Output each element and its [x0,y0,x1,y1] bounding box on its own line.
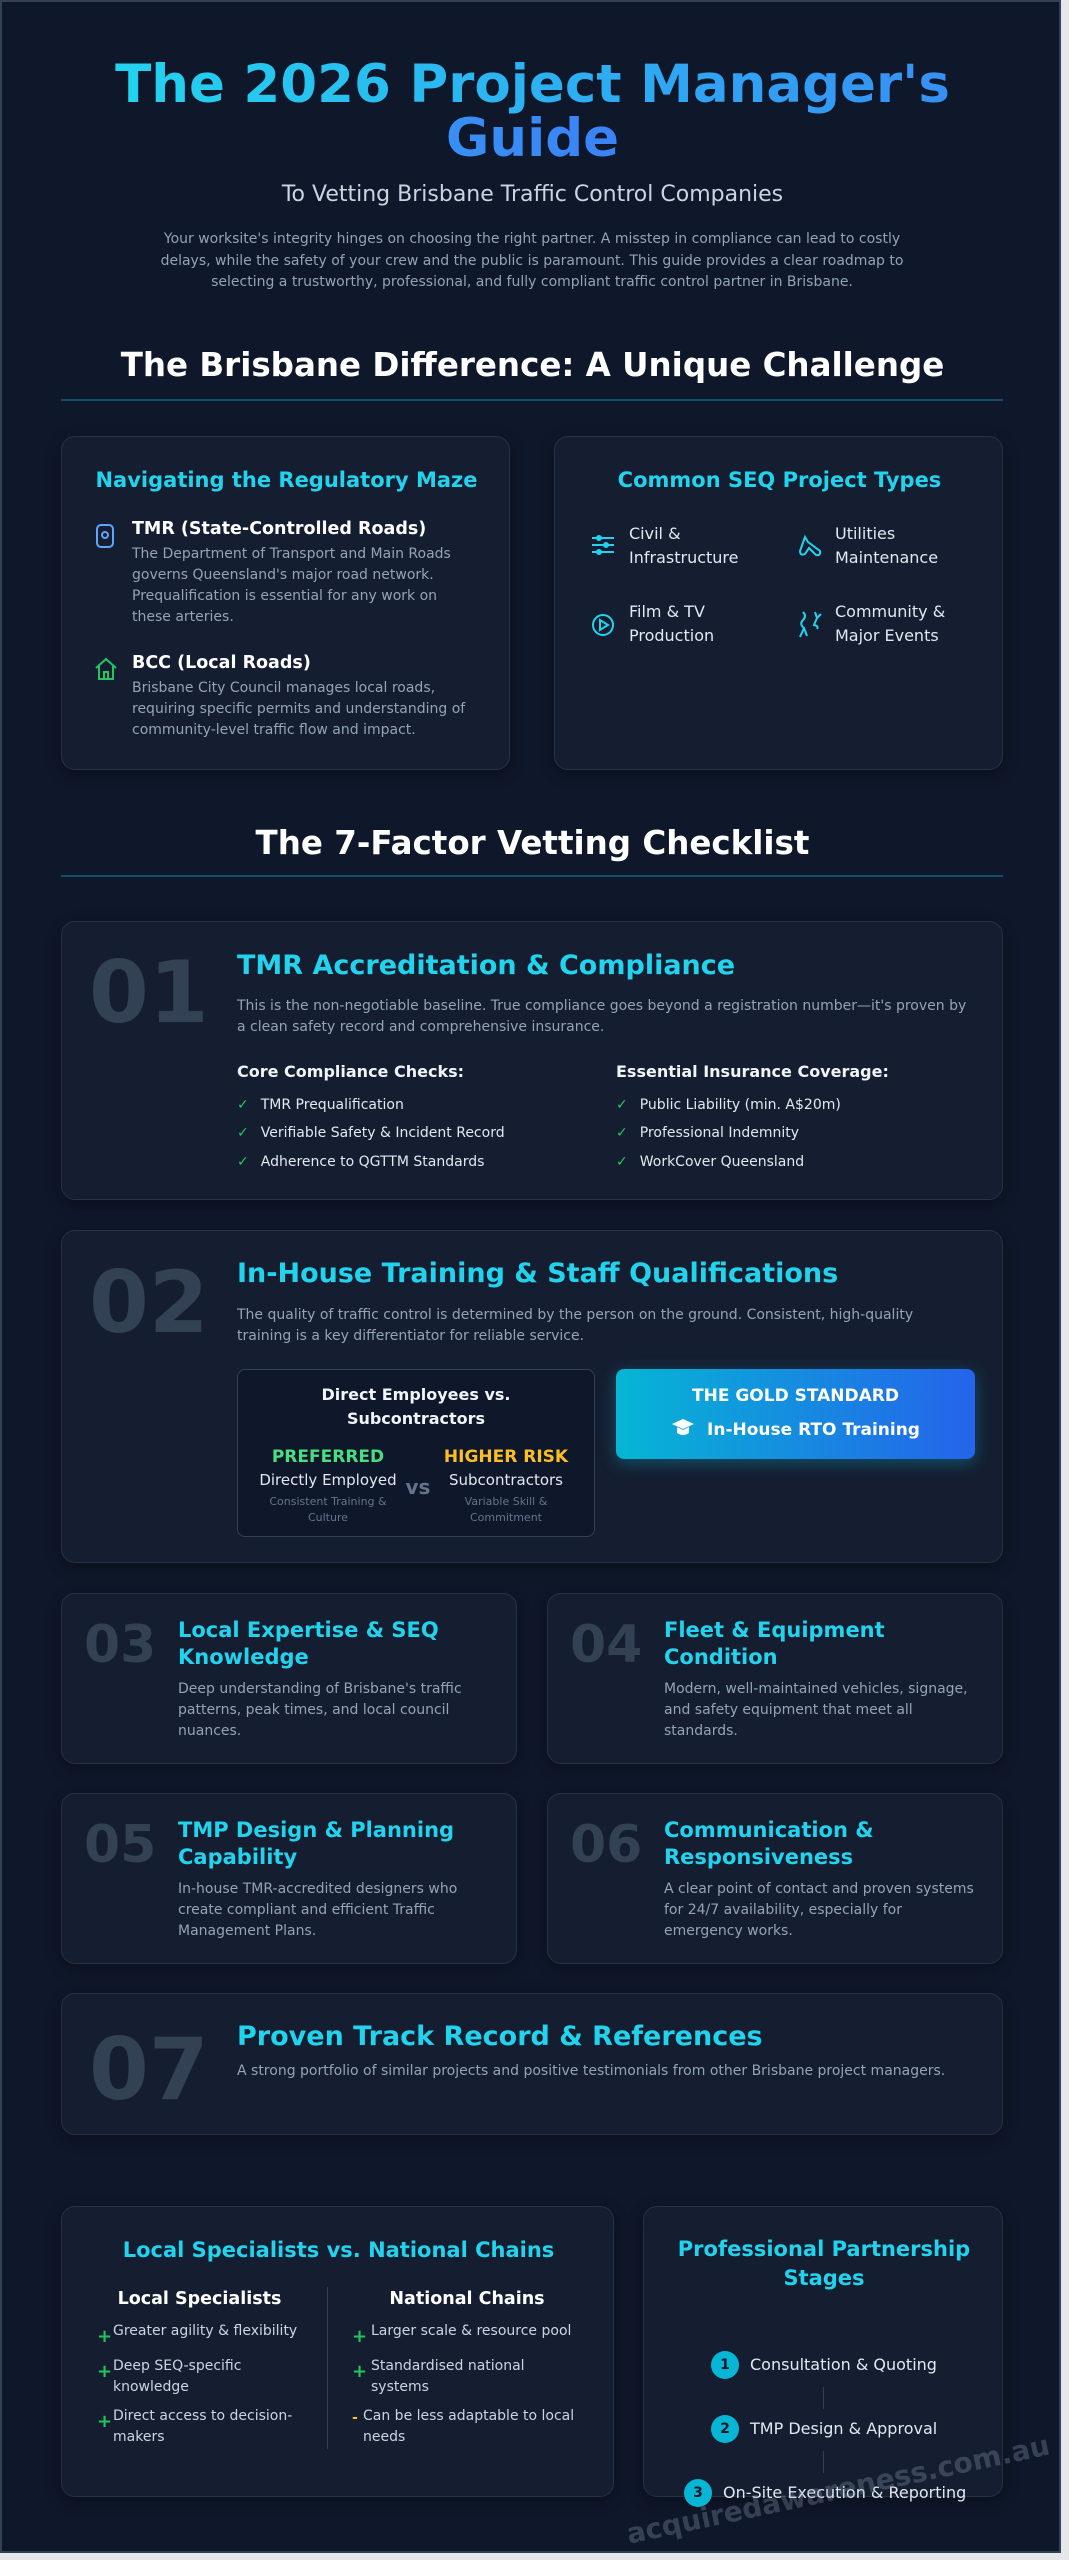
BCC text: Brisbane City Council manages local roads, requiring specific permits and understanding of community-level traffic flow and impact. [132,680,465,738]
column: national: + [352,2326,367,2347]
panel: project types [554,436,1003,770]
panel: factor 04: 04 [570,1615,642,1675]
watermark: acquiredawareness.com.au [623,2429,1053,2551]
panel: factor 06: Communication & Responsiveness [664,1818,874,1869]
icon: TMR [96,524,114,548]
comparison box: Variable Skill & Commitment [465,1495,547,1524]
title: Guide [446,108,619,169]
item: civil: Civil & [629,524,681,543]
stage 2 [711,2415,937,2443]
panel: factor 04 [547,1593,1003,1764]
column: national: systems [371,2379,429,2395]
column: national: Standardised national [371,2358,525,2374]
gold standard callout [616,1369,975,1459]
item: utilities [799,524,938,567]
list: insurance [616,1062,889,1170]
BCC heading: BCC (Local Roads) [132,653,311,673]
panel: factor 05: In-house TMR-accredited designers who create compliant and efficient Traffic Management Plans. [178,1881,457,1939]
title 01: TMR Accreditation & Compliance [237,950,735,981]
panel: partnership stages: Professional Partnership [678,2237,970,2261]
panel: local vs national [61,2206,614,2497]
item: utilities: Maintenance [835,548,938,567]
column: local [97,2289,297,2445]
title [115,54,950,169]
item: events [799,602,945,645]
subtitle: To Vetting Brisbane Traffic Control Companies [282,182,783,207]
list: insurance: ✓ Professional Indemnity [616,1125,799,1141]
column: national: needs [363,2429,405,2445]
column: national [352,2289,574,2445]
number 02: 02 [89,1253,209,1353]
list: insurance: ✓ Public Liability (min. A$20m) [616,1097,841,1113]
stage 3: 3 [693,2485,703,2501]
panel: factor 05 [61,1793,517,1964]
stage 1: 1 [720,2357,730,2373]
panel: factor 06: A clear point of contact and proven systems for 24/7 availability, especially for emergency works. [664,1881,974,1939]
column: local: makers [113,2429,164,2445]
column: local: Local Specialists [118,2289,281,2309]
panel: factor 01 [61,921,1003,1200]
heading: Brisbane Difference: The Brisbane Difference: A Unique Challenge [121,346,944,384]
TMR text: The Department of Transport and Main Roads governs Queensland's major road network. Prequalification is essential for any work on these arteries. [132,546,451,625]
panel: factor 03: Local Expertise & SEQ Knowledge [178,1618,439,1669]
panel: factor 07 [61,1993,1003,2135]
panel: factor 03: Deep understanding of Brisbane's traffic patterns, peak times, and local council nuances. [178,1681,462,1739]
comparison box: vs [406,1475,430,1499]
panel heading: Common SEQ Project Types [618,468,941,492]
icon: house [95,658,117,680]
panel: partnership stages [643,2206,1003,2497]
column: national: - [352,2410,358,2426]
list: compliance checks: ✓ Verifiable Safety & Incident Record [237,1125,505,1141]
panel: factor 07: 07 [89,2020,209,2120]
comparison box: HIGHER RISK [444,1447,568,1467]
panel: factor 05: 05 [84,1815,156,1875]
column: local: + [97,2326,112,2347]
item: film: Production [629,626,714,645]
item: civil: Infrastructure [629,548,738,567]
column: local: knowledge [113,2379,189,2395]
panel: factor 04: Modern, well-maintained vehicles, signage, and safety equipment that meet all standards. [664,1681,968,1739]
column: national: + [352,2361,367,2382]
gold standard callout: In-House RTO Training [707,1420,920,1440]
stage 2: 2 [720,2421,730,2437]
column: local: Deep SEQ-specific [113,2358,241,2374]
stage 3: On-Site Execution & Reporting [723,2483,966,2502]
item: events: Community & [835,602,945,621]
item: film [592,602,714,645]
list: insurance: ✓ WorkCover Queensland [616,1154,804,1170]
panel: factor 02 [61,1230,1003,1563]
stage 3 [684,2479,966,2507]
panel: factor 03 [61,1593,517,1764]
stage 2: TMP Design & Approval [750,2419,937,2438]
comparison box: PREFERRED [272,1447,384,1467]
comparison box: Consistent Training & Culture [269,1495,387,1524]
column: local: Greater agility & flexibility [113,2323,297,2339]
comparison box: Subcontractors [347,1409,485,1428]
panel heading: Navigating the Regulatory Maze [95,468,478,492]
desc 01: This is the non-negotiable baseline. True compliance goes beyond a registration number—it's proven by a clean safety record and comprehensive insurance. [237,998,966,1035]
panel: factor 05: TMP Design & Planning Capability [178,1818,454,1869]
column: local: Direct access to decision- [113,2408,292,2424]
panel: factor 07: A strong portfolio of similar projects and positive testimonials from other Brisbane project managers. [237,2063,945,2079]
panel: factor 03: 03 [84,1615,156,1675]
column: national: Larger scale & resource pool [371,2323,571,2339]
column: national: Can be less adaptable to local [363,2408,574,2424]
item: utilities: Utilities [835,524,895,543]
desc 02: The quality of traffic control is determined by the person on the ground. Consistent, high-quality training is a key differentiator for reliable service. [237,1307,913,1344]
title: The 2026 Project Manager's [115,54,950,115]
gold standard callout: THE GOLD STANDARD [692,1386,899,1406]
stage 1: Consultation & Quoting [750,2355,937,2374]
stage 1 [711,2351,937,2379]
list: compliance checks: ✓ TMR Prequalification [237,1097,404,1113]
TMR heading: TMR (State-Controlled Roads) [132,519,426,539]
heading: checklist: The 7-Factor Vetting Checklist [256,824,809,862]
item: civil [592,524,738,567]
list: compliance checks: ✓ Adherence to QGTTM Standards [237,1154,484,1170]
panel: factor 07: Proven Track Record & References [237,2021,763,2052]
comparison box: Directly Employed [259,1471,397,1489]
panel: factor 04: Fleet & Equipment Condition [664,1618,885,1669]
list: compliance checks: Core Compliance Checks: [237,1062,464,1081]
panel: factor 06: 06 [570,1815,642,1875]
column: local: + [97,2411,112,2432]
panel: factor 06 [547,1793,1003,1964]
panel: local vs national: Local Specialists vs. National Chains [123,2238,554,2262]
comparison box [237,1369,595,1537]
column: national: National Chains [389,2289,545,2309]
list: compliance checks [237,1062,505,1170]
list: insurance: Essential Insurance Coverage: [616,1062,889,1081]
title 02: In-House Training & Staff Qualifications [237,1258,838,1289]
item: film: Film & TV [629,602,705,621]
comparison box: Subcontractors [449,1471,563,1489]
number 01: 01 [89,943,209,1043]
panel: partnership stages: Stages [783,2266,865,2290]
item: events: Major Events [835,626,939,645]
comparison box: Direct Employees vs. [322,1385,510,1404]
panel: regulatory maze [61,436,510,770]
column: local: + [97,2361,112,2382]
intro paragraph: Your worksite's integrity hinges on choosing the right partner. A misstep in compliance can lead to costly delays, while the safety of your crew and the public is paramount. This guide provides a clear roadmap to selecting a trustworthy, professional, and fully compliant traffic control partner in Brisbane. [161,231,903,290]
